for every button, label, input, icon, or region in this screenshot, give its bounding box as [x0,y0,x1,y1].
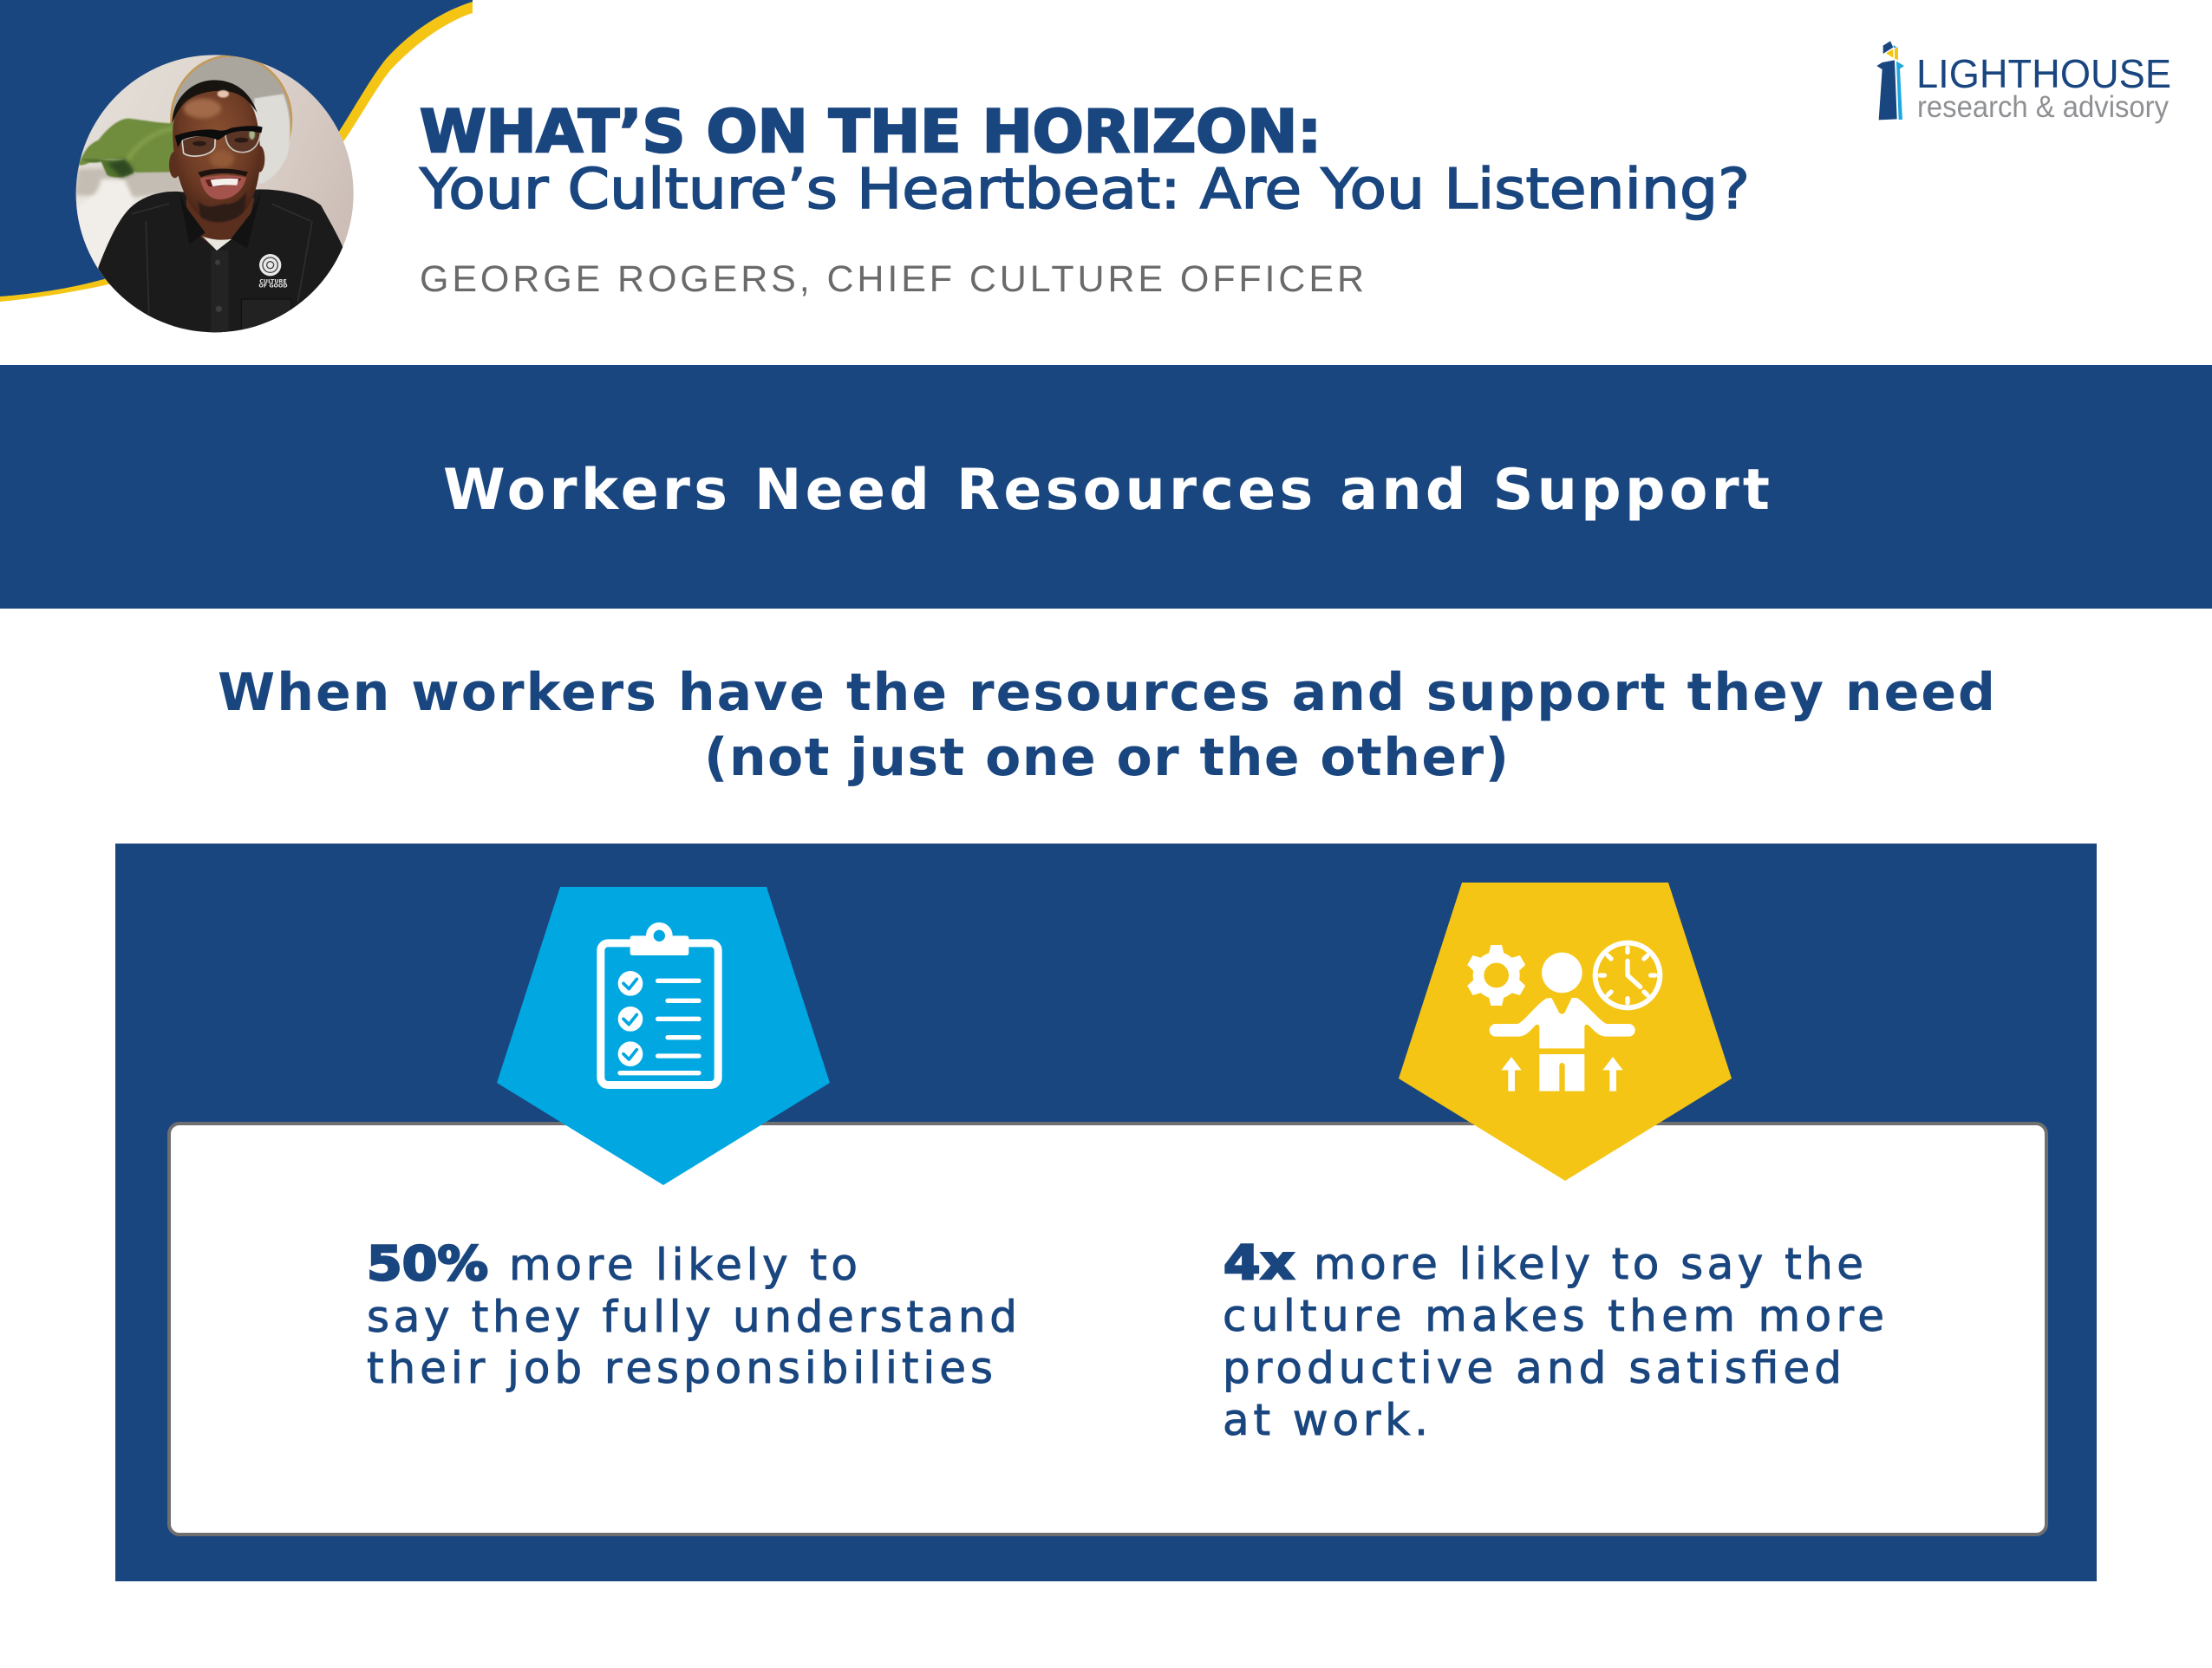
mirror [171,55,291,184]
text block: 4x stat: at work. [1223,1395,1428,1445]
text block: 4x stat: productive and satisfied [1223,1343,1842,1393]
logo: Lighthouse Research & Advisory [1876,41,2171,124]
icon: lighthouse [1876,41,1904,120]
glasses [175,126,263,156]
white card [169,1124,2046,1534]
header curved background [0,0,473,302]
text block: 50% stat: more likely to [509,1240,858,1290]
subheading [218,662,1995,788]
text block: 4x stat: culture makes them more [1223,1291,1884,1341]
banner [0,365,2212,609]
subtitle: Your Culture’s Heartbeat: Are You Listening? [419,158,1750,222]
logo: Lighthouse Research & Advisory: LIGHTHOUSE [1916,51,2171,96]
panel: statistics [115,844,2097,1581]
shirt logo: OF GOOD [258,283,288,290]
smile [198,169,248,199]
subheading: (not just one or the other) [704,727,1509,788]
icon: clipboard pentagon [497,887,830,1185]
text block: 50% stat [367,1236,1017,1393]
text block: 50% stat: their job responsibilities [367,1343,993,1393]
banner heading: Workers Need Resources and Support [443,458,1770,523]
shirt logo: CULTURE [259,278,287,284]
text block: 50% stat: 50% [367,1236,488,1291]
shirt [98,189,347,342]
neck and undershirt [179,191,262,251]
subheading: When workers have the resources and support they need [218,662,1995,723]
author line: GEORGE ROGERS, CHIEF CULTURE OFFICER [420,258,1364,300]
face [169,80,264,222]
text block: 4x stat: 4x [1223,1235,1295,1290]
text block: 50% stat: say they fully understand [367,1292,1017,1342]
title: WHAT’S ON THE HORIZON: [420,98,1321,166]
text block: 4x stat: more likely to say the [1314,1239,1863,1289]
icon: productivity pentagon [1399,883,1732,1181]
logo: Lighthouse Research & Advisory: research & advisory [1917,90,2169,124]
photo: George Rogers portrait [76,55,354,333]
text block: 4x stat [1223,1235,1884,1445]
shirt logo [258,254,288,290]
plant and vase [72,119,184,279]
